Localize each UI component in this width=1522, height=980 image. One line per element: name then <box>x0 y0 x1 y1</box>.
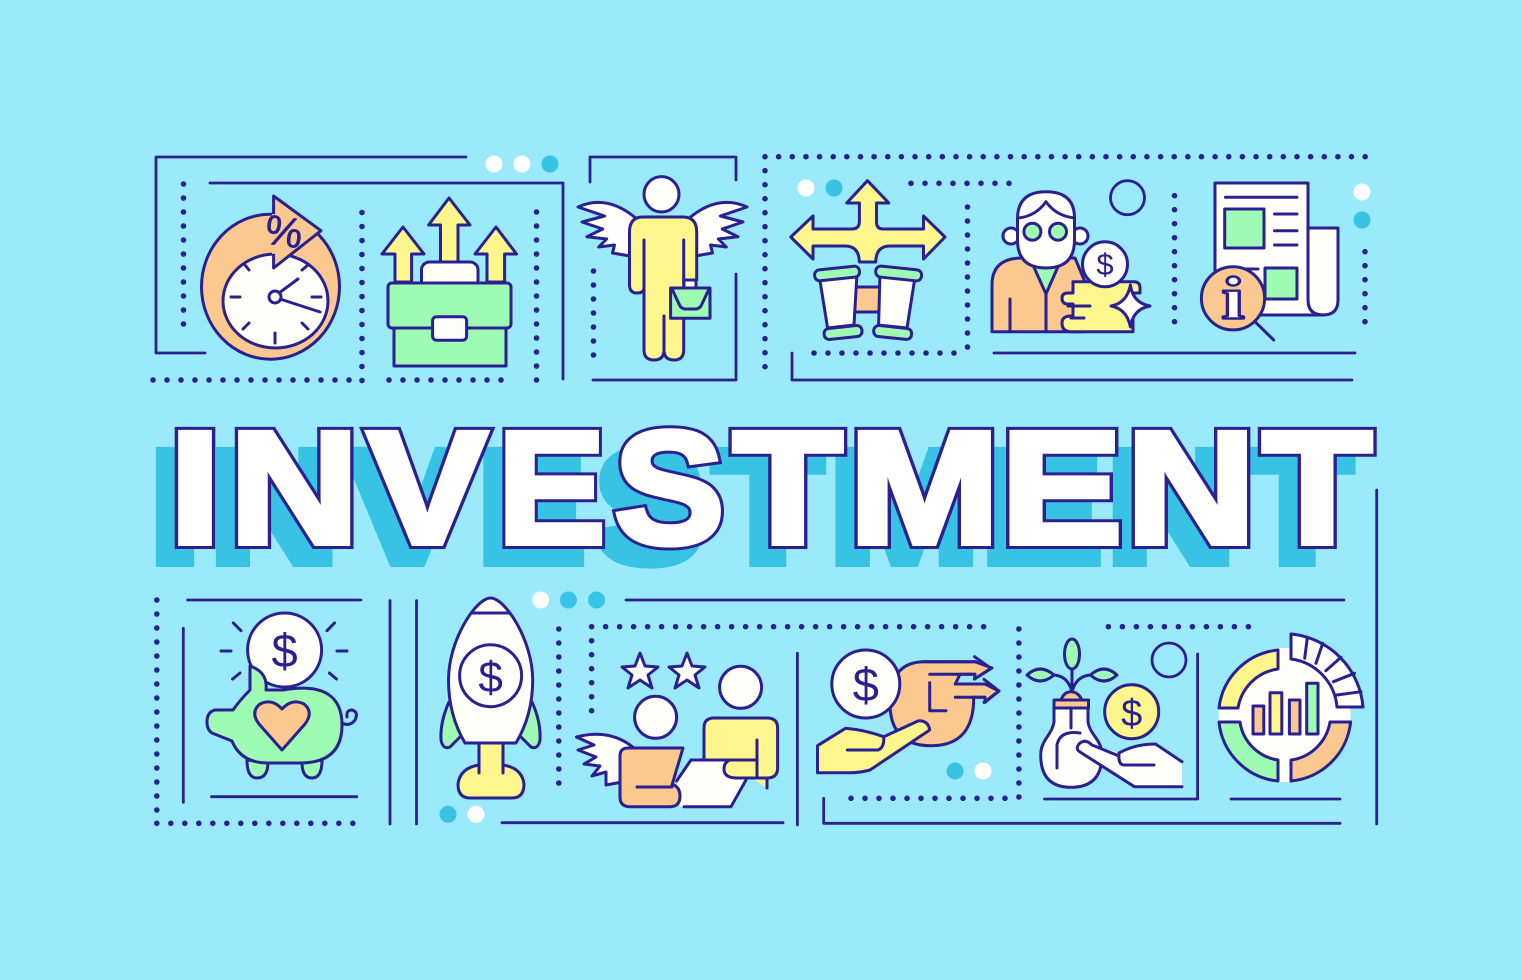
title fill: T <box>733 398 843 577</box>
title shadow: T <box>713 417 823 596</box>
icon: piggy bank with coin <box>207 613 356 778</box>
title shadow: M <box>829 418 980 597</box>
title shadow: N <box>1106 417 1236 596</box>
title fill: E <box>1001 399 1122 578</box>
icon: hand with coin and transfer arrows <box>818 650 999 773</box>
icon: angel investor meeting <box>576 653 778 807</box>
title outline: V <box>367 398 487 577</box>
dollar sign: $ <box>272 624 298 677</box>
icon: clock with percent arrow <box>202 196 340 359</box>
title fill: E <box>498 399 605 578</box>
dollar sign: $ <box>853 658 879 711</box>
title shadow: E <box>478 418 585 597</box>
icon: briefcase with growth arrows <box>382 198 516 366</box>
info letter: i <box>1221 265 1245 332</box>
title <box>149 398 1372 597</box>
title outline: N <box>1126 398 1256 577</box>
title fill: S <box>614 399 724 577</box>
icon: old investor with coins <box>992 192 1150 332</box>
icon: data dashboard donut chart <box>1219 634 1363 782</box>
title outline: T <box>1262 398 1372 577</box>
title outline: E <box>1001 399 1122 578</box>
title outline <box>169 398 1372 578</box>
icon: binoculars with direction arrows <box>791 181 945 340</box>
dollar sign: $ <box>478 653 503 702</box>
title outline: S <box>614 399 724 577</box>
title fill: V <box>367 398 487 577</box>
title shadow: V <box>347 417 467 596</box>
title fill: I <box>169 398 221 577</box>
title fill: N <box>1126 398 1256 577</box>
top frame lines and dots <box>153 156 1370 381</box>
title fill: T <box>1262 398 1372 577</box>
bottom frame lines and dots <box>157 490 1377 825</box>
title outline: E <box>498 399 605 578</box>
dollar sign: $ <box>1096 247 1114 282</box>
title outline: N <box>229 398 359 577</box>
title shadow: S <box>594 418 704 596</box>
title outline: T <box>733 398 843 577</box>
title shadow: T <box>1242 417 1352 596</box>
icon: rocket with dollar coin <box>441 598 540 798</box>
percent sign: % <box>262 206 306 257</box>
icon: light bulb with plant and coin <box>1027 639 1182 787</box>
title shadow: E <box>981 418 1102 597</box>
title shadow <box>149 417 1352 597</box>
title outline: M <box>849 399 1000 578</box>
title fill: N <box>229 398 359 577</box>
title shadow: N <box>209 417 339 596</box>
title shadow: I <box>149 417 201 596</box>
title fill: M <box>849 399 1000 578</box>
title outline: I <box>169 398 221 577</box>
title fill <box>169 398 1372 578</box>
icon: newspaper with info magnifier <box>1201 183 1338 340</box>
dollar sign: $ <box>1121 693 1142 735</box>
icon: business angel with wings <box>578 177 747 360</box>
